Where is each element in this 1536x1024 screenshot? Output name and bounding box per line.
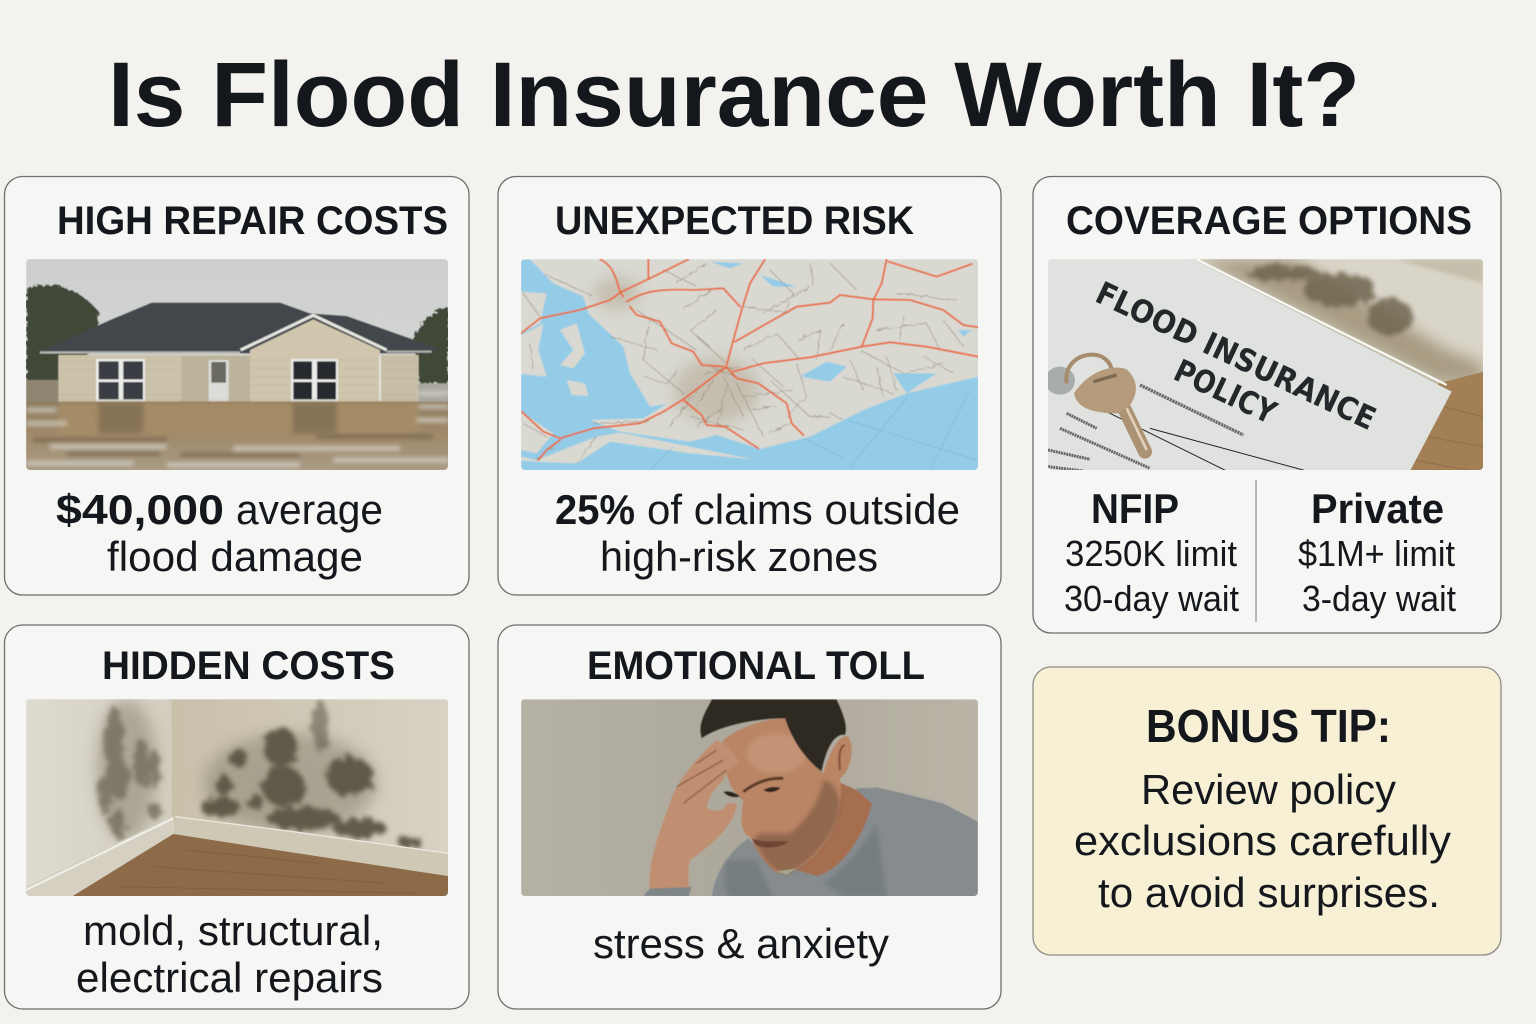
card background <box>1033 176 1501 633</box>
photo: flood insurance policy and key <box>1045 259 1483 471</box>
caption: mold, structural, electrical repairs: mold, structural, <box>83 907 383 954</box>
heading: coverage options: COVERAGE OPTIONS <box>1066 199 1472 243</box>
panel: high repair costs <box>4 176 469 595</box>
stat: 25% of claims outside high-risk zones: high-risk zones <box>600 533 878 580</box>
heading: unexpected risk: UNEXPECTED RISK <box>555 199 914 243</box>
panel: emotional toll <box>498 625 1001 1009</box>
photo: flood insurance policy and key: POLICY <box>1168 353 1282 432</box>
column: NFIP: NFIP <box>1091 485 1179 532</box>
stat: 25% of claims outside high-risk zones <box>555 486 960 580</box>
caption: stress & anxiety: stress & anxiety <box>593 920 889 967</box>
column: Private: Private <box>1311 485 1444 532</box>
heading: hidden costs: HIDDEN COSTS <box>102 644 395 688</box>
card background <box>4 625 469 1009</box>
card background <box>4 176 469 595</box>
photo: road map with coast <box>521 259 978 471</box>
stat: $40,000 average flood damage: average <box>236 486 383 533</box>
tip text: exclusions carefully <box>1074 817 1451 864</box>
stat: $40,000 average flood damage: flood damage <box>107 533 363 580</box>
heading: bonus tip: BONUS TIP: <box>1146 700 1391 752</box>
photo: stressed man holding his head <box>521 699 978 898</box>
card background <box>1033 667 1501 955</box>
photo: flooded house <box>26 259 449 471</box>
heading: emotional toll: EMOTIONAL TOLL <box>587 644 925 688</box>
comparison divider <box>1255 480 1257 622</box>
column: Private <box>1298 485 1456 619</box>
caption: mold, structural, electrical repairs: electrical repairs <box>76 954 383 1001</box>
tip text: Review policy <box>1141 766 1396 813</box>
photo: flood insurance policy and key: FLOOD INSURANCE <box>1090 275 1381 438</box>
column: NFIP: 3250K limit <box>1065 533 1237 574</box>
panel: coverage options <box>1033 176 1501 633</box>
panel: hidden costs <box>4 625 469 1009</box>
column: NFIP: 30-day wait <box>1064 578 1239 619</box>
photo: mold on wall corner <box>26 699 448 897</box>
stat: $40,000 average flood damage <box>56 486 383 580</box>
panel: bonus tip <box>1033 667 1501 955</box>
card background <box>498 176 1001 595</box>
panel: unexpected risk <box>498 176 1001 595</box>
heading: high repair costs: HIGH REPAIR COSTS <box>57 199 448 243</box>
tip text <box>1074 766 1451 916</box>
column: NFIP <box>1064 485 1239 619</box>
caption: mold, structural, electrical repairs <box>76 907 383 1001</box>
column: Private: $1M+ limit <box>1298 533 1455 574</box>
column: Private: 3-day wait <box>1302 578 1456 619</box>
tip text: to avoid surprises. <box>1098 869 1440 916</box>
stat: 25% of claims outside high-risk zones: of claims outside <box>647 486 960 533</box>
title: Is Flood Insurance Worth It? <box>108 44 1360 146</box>
card background <box>498 625 1001 1009</box>
stat: 25% of claims outside high-risk zones: 25% <box>555 486 635 533</box>
stat: $40,000 average flood damage: $40,000 <box>56 486 224 533</box>
